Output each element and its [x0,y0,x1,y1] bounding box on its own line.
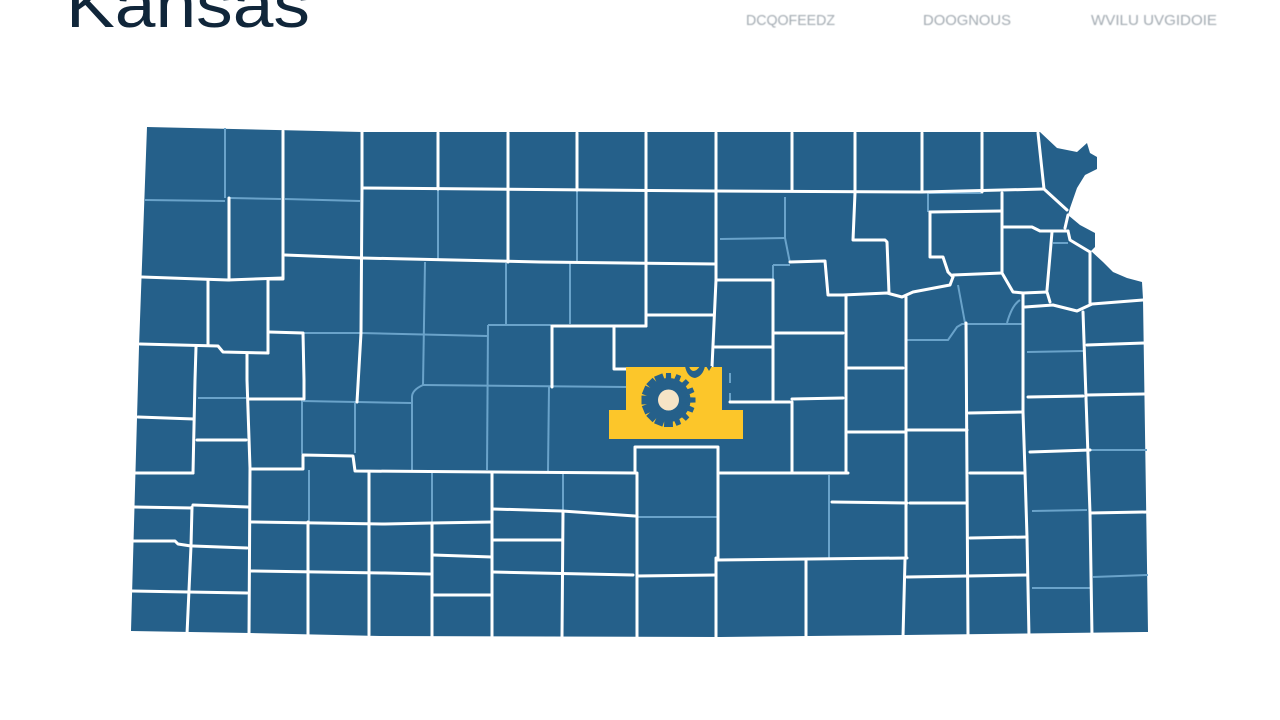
map: Kansas counties [131,127,1148,637]
minor county lines [145,128,1148,588]
icon: small gear fragment [685,366,712,378]
navigation labels [746,12,1217,29]
navigation labels: WVILU UVGIDOIE [1091,12,1217,29]
navigation labels: DOOGNOUS [923,12,1011,29]
state outline [131,127,1148,637]
marker: yellow factory with gear [609,366,743,439]
navigation labels: DCQOFEEDZ [746,12,835,29]
icon: gear [642,373,696,427]
major county lines [132,131,1147,637]
